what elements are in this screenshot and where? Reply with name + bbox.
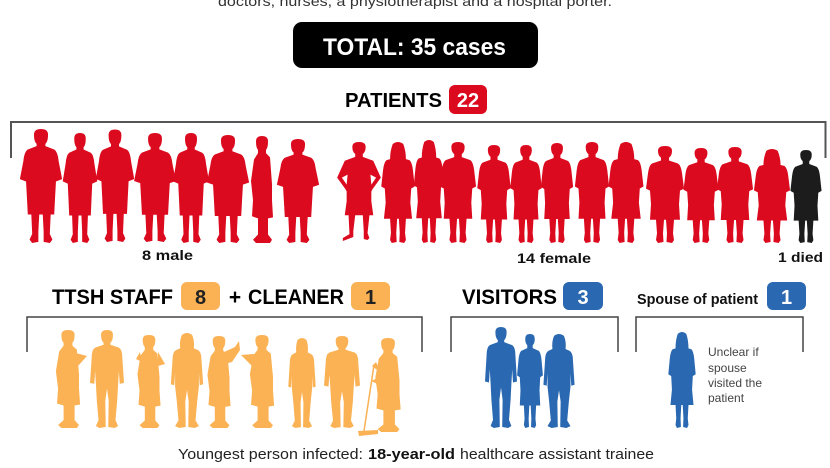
- visitors heading: [462, 282, 603, 310]
- deceased patient: [790, 150, 822, 243]
- spouse note: [708, 345, 762, 405]
- staff heading: CLEANER: [248, 286, 344, 309]
- footer note: [178, 446, 654, 463]
- patients heading: [345, 85, 487, 114]
- staff and cleaner silhouettes: [56, 330, 360, 428]
- staff heading: +: [229, 286, 241, 309]
- staff heading: 8: [195, 287, 206, 309]
- visitor silhouettes: [485, 327, 575, 428]
- visitors heading: VISITORS: [462, 286, 557, 309]
- total banner: [293, 22, 538, 68]
- label: 1 died: 1 died: [778, 249, 823, 265]
- cleaner with broom: [358, 338, 401, 436]
- visitors bracket: [451, 317, 618, 352]
- visitors heading: 3: [577, 287, 589, 309]
- spouse note: patient: [708, 391, 745, 405]
- spouse note: Unclear if: [708, 345, 759, 359]
- staff heading: TTSH STAFF: [52, 286, 173, 309]
- staff heading: [52, 282, 390, 310]
- female patients: [337, 140, 790, 243]
- footer note: 18-year-old: [368, 446, 455, 463]
- patients heading: PATIENTS: [345, 90, 442, 112]
- spouse heading: Spouse of patient: [637, 291, 758, 308]
- label: 14 female: 14 female: [517, 250, 591, 266]
- total banner: TOTAL: 35 cases: [323, 34, 506, 61]
- footer note: healthcare assistant trainee: [460, 446, 654, 463]
- spouse bracket: [636, 317, 803, 352]
- patients heading: 22: [457, 90, 479, 112]
- staff bracket: [27, 317, 422, 352]
- patients bracket: [11, 122, 826, 158]
- spouse heading: 1: [781, 287, 792, 309]
- spouse heading: [637, 282, 806, 310]
- staff heading: 1: [365, 287, 376, 309]
- male patients: [20, 129, 319, 243]
- spouse note: visited the: [708, 376, 762, 390]
- spouse note: spouse: [708, 361, 747, 375]
- label: 8 male: 8 male: [142, 247, 193, 263]
- footer note: Youngest person infected:: [178, 446, 363, 463]
- spouse silhouette: [668, 332, 696, 428]
